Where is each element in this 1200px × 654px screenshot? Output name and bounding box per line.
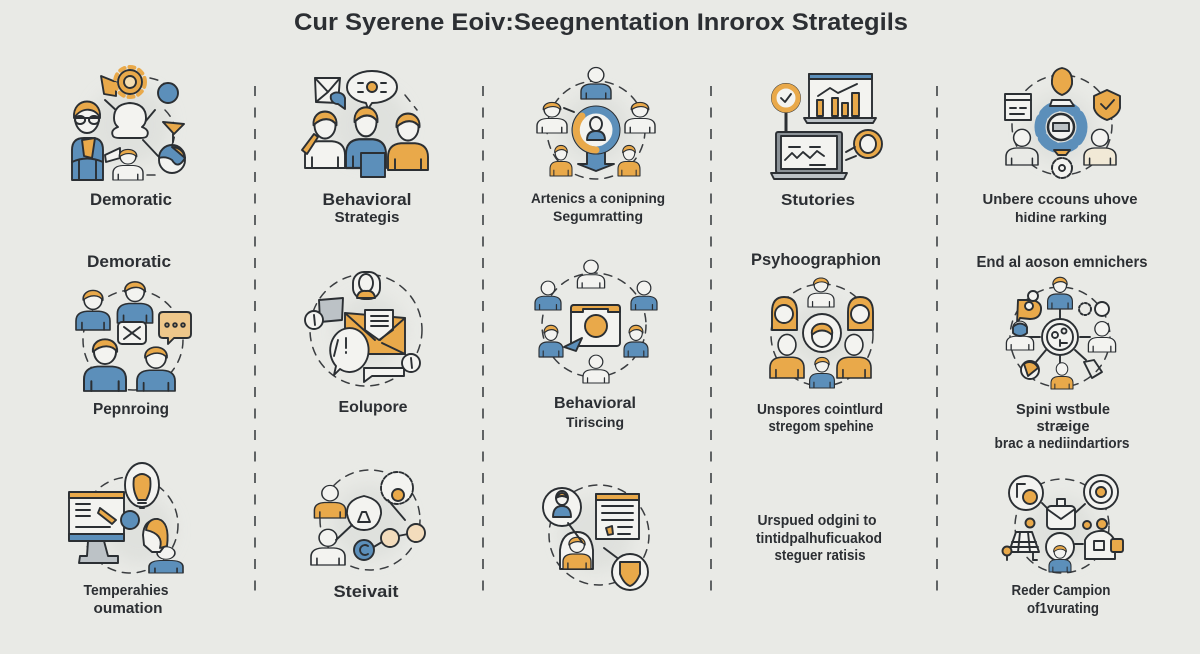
column dividers [255, 86, 937, 592]
icon: people and messages [76, 282, 191, 391]
icon: monitor, bulb and person [69, 463, 183, 573]
text line 2: tintidpalhuficuakod [756, 531, 882, 547]
icon: envelope with tools and people [1002, 475, 1123, 573]
label line 1: Unspores cointlurd [757, 402, 883, 418]
panel: artenics r1c3 [531, 68, 665, 224]
panel: demoratic r1c1 [72, 67, 185, 209]
icon: circle of people with central face [770, 278, 873, 388]
heading: Demoratic [87, 253, 171, 271]
icon: people network with gear [72, 67, 185, 180]
label: Eolupore [338, 399, 408, 416]
text line 1: Urspued odgini to [758, 513, 877, 529]
label line 1: Behavioral [322, 191, 412, 209]
panel: demoratic r2c1 [76, 253, 191, 418]
label line 1: Spini wstbule [1016, 402, 1110, 418]
panel: psyhoographion r2c4 [751, 251, 883, 435]
label line 1: Behavioral [554, 395, 636, 412]
label: Demoratic [90, 191, 172, 209]
heading: Psyhoographion [751, 251, 881, 269]
icon: ring with five people [537, 68, 655, 179]
icon: three people with speech bubble [302, 71, 428, 177]
label line 1: Artenics a conipning [531, 190, 665, 206]
label line 2: of1vurating [1027, 601, 1099, 617]
panel: document icon r3c3 [543, 485, 649, 590]
label line 2: stregom spehine [768, 419, 874, 435]
panel: behavioral r2c3 [535, 260, 657, 430]
panel: unbere r1c5 [982, 68, 1138, 225]
label line 2: Strategis [334, 210, 400, 226]
label line 2: hidine rarking [1015, 209, 1107, 225]
label line 1: Unbere ccouns uhove [982, 191, 1138, 208]
panel: temperahies r3c1 [69, 463, 183, 617]
icon: document and people [543, 485, 649, 590]
label: Pepnroing [93, 401, 169, 418]
icon: hub network [1006, 277, 1116, 389]
label: Stutories [781, 192, 855, 209]
panel: stutories r1c4 [771, 74, 882, 209]
icon: laptops with chart [771, 74, 882, 179]
title: Cur Syerene Eoiv:Seegnentation Inrorox Strategils [294, 9, 908, 36]
label line 1: Temperahies [84, 583, 168, 599]
label line 2: stræige [1036, 419, 1090, 435]
label line 3: brac a nediindartiors [994, 436, 1130, 452]
icon: gear with people and shield [1005, 68, 1120, 178]
panel: urspued r3c4 [756, 513, 882, 564]
text line 3: steguer ratisis [774, 548, 866, 564]
label line 1: Reder Campion [1012, 583, 1110, 599]
label line 2: Segumratting [553, 208, 643, 224]
panel: steivait r3c2 [311, 470, 425, 601]
icon: window with six people [535, 260, 657, 383]
panel: reder campion r3c5 [1002, 475, 1123, 617]
label line 2: oumation [94, 601, 162, 617]
label: Steivait [334, 583, 399, 601]
heading: End al aoson emnichers [976, 254, 1148, 271]
panel: behavioral r1c2 [302, 71, 428, 226]
panel: eolupore r2c2 [305, 272, 422, 416]
label line 2: Tiriscing [566, 414, 624, 430]
icon: people, gear and circles [311, 470, 425, 570]
icon: envelope with speech bubbles [305, 272, 422, 386]
panel: end al aoson r2c5 [976, 254, 1148, 452]
